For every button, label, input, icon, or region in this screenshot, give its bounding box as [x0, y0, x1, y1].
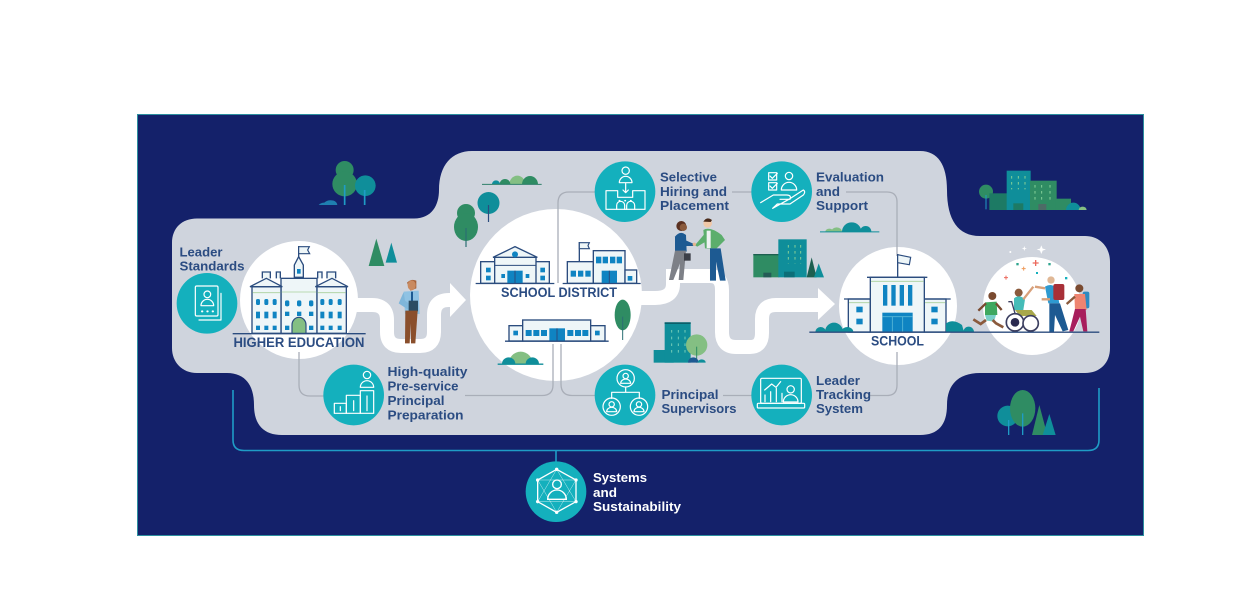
text: High-quality Pre-service Principal Preparation: High-quality: [388, 364, 468, 379]
people: handshake: [669, 218, 726, 281]
arrow: higher education to school district: [352, 283, 466, 346]
icon: Leader Tracking System: [751, 365, 812, 425]
text: Leader Standards: Standards: [180, 259, 244, 274]
text: Selective Hiring and Placement: Placement: [660, 198, 730, 213]
bush: district bottom: [498, 352, 543, 364]
text: Leader Tracking System: Tracking: [816, 387, 871, 402]
building: higher education: [233, 246, 366, 334]
arrow: school district to school: [636, 276, 835, 347]
grey pathway shape: [172, 151, 1110, 435]
running child: [985, 302, 997, 315]
icon: Leader Standards: [177, 273, 237, 334]
text: Leader Tracking System: System: [816, 401, 863, 416]
conifers: left: [369, 239, 397, 266]
person: student walking the path: [399, 280, 420, 343]
white circle: school district: [470, 209, 642, 381]
icon: Principal Supervisors: [595, 365, 655, 425]
text: Selective Hiring and Placement: Hiring and: [660, 184, 727, 199]
text: Leader Standards: Leader: [180, 245, 223, 260]
icon: Evaluation and Support: [751, 161, 812, 222]
text: Systems and Sustainability: Systems: [593, 470, 647, 485]
text: Principal Supervisors: Principal: [662, 387, 718, 402]
building: district school two: [563, 242, 641, 283]
navy background panel: [138, 114, 1144, 536]
trees: bottom right on navy: [997, 390, 1056, 435]
label: School District: SCHOOL DISTRICT: [501, 285, 618, 300]
text: High-quality Pre-service Principal Preparation: Principal: [388, 393, 444, 408]
tree: inside district circle: [615, 300, 631, 340]
white circle: higher education: [240, 241, 358, 359]
buildings: top right on navy: [979, 171, 1087, 210]
white circle: students: [983, 257, 1081, 355]
building: school: [844, 254, 951, 332]
trees: beside district: [454, 192, 500, 247]
students celebrating: [973, 245, 1089, 332]
text: Systems and Sustainability: Sustainability: [593, 499, 682, 514]
bush: under evaluation: [820, 222, 879, 232]
connector lines: [299, 192, 897, 396]
label: School: SCHOOL: [871, 334, 924, 349]
text: High-quality Pre-service Principal Preparation: Preparation: [388, 408, 464, 423]
child in wheelchair: [1015, 289, 1023, 297]
text: Evaluation and Support: and: [816, 184, 840, 199]
white circle: school: [839, 247, 957, 365]
icon: Systems and Sustainability: [526, 461, 586, 522]
label: Higher Education: HIGHER EDUCATION: [234, 335, 364, 350]
stars and confetti: [1004, 245, 1067, 280]
text: Leader Tracking System: Leader: [816, 373, 860, 388]
icon: Selective Hiring: [595, 161, 655, 222]
text: Evaluation and Support: Support: [816, 198, 869, 213]
adult with backpack: [1047, 276, 1055, 284]
teen with backpack: [1075, 284, 1083, 292]
text: Evaluation and Support: Evaluation: [816, 170, 884, 185]
text: Selective Hiring and Placement: Selective: [660, 170, 717, 185]
bushes and ground line: school and students: [809, 321, 1099, 332]
buildings: centre below school district: [654, 322, 707, 363]
buildings: middle right of handshake: [753, 239, 824, 277]
text: Systems and Sustainability: and: [593, 485, 617, 500]
bush: top centre: [482, 176, 542, 184]
text: Principal Supervisors: Supervisors: [662, 401, 736, 416]
systems bracket line: [233, 388, 1099, 463]
building: district school three: [505, 320, 609, 341]
building: district school one: [476, 247, 554, 283]
icon: High-quality preparation: [323, 365, 384, 425]
trees: top left on navy: [319, 161, 376, 205]
text: High-quality Pre-service Principal Preparation: Pre-service: [388, 379, 458, 394]
